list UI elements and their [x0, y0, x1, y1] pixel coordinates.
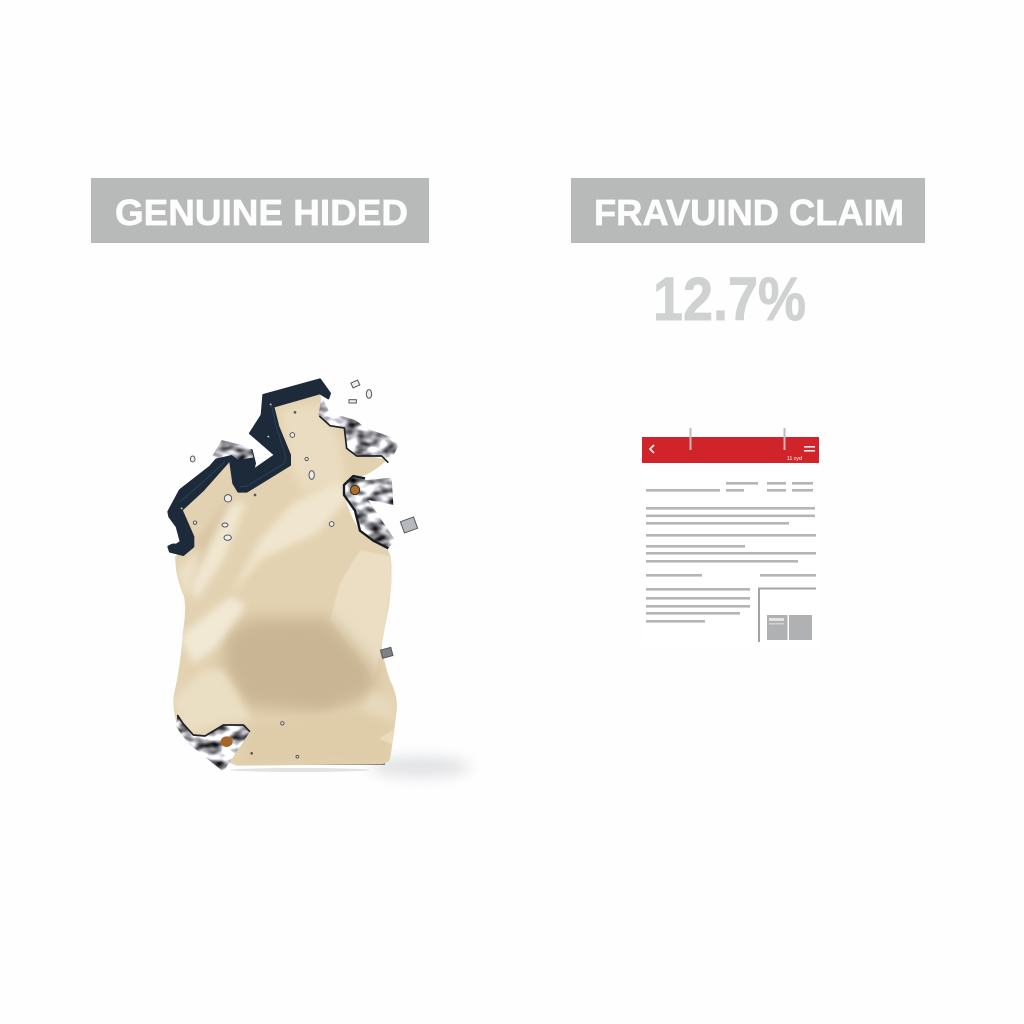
- right heading label: [571, 178, 925, 243]
- red header bar: [642, 437, 819, 463]
- dark torn rim: [168, 379, 330, 555]
- right heading label: FRAVUIND CLAIM: [594, 194, 904, 233]
- bag body: [173, 390, 397, 767]
- percentage figure: 12.7%: [653, 266, 806, 334]
- left heading label: GENUINE HIDED: [115, 194, 408, 233]
- infographic canvas: [91, 178, 925, 781]
- foil tear: right side: [344, 476, 395, 548]
- illustration: red-header document: [642, 428, 819, 647]
- document sheet: [642, 437, 819, 647]
- foil tear: top right: [318, 397, 401, 463]
- binding pins: [690, 428, 786, 450]
- rim highlight fold: [180, 405, 286, 502]
- foil tear: bottom left: [176, 715, 250, 772]
- illustration: torn paper bag: [168, 379, 470, 777]
- left heading label: [91, 178, 429, 243]
- foil tear: top left: [210, 440, 253, 460]
- scattered foil fragments: [181, 380, 418, 758]
- ground shadow: [230, 757, 470, 777]
- corner bracket: [759, 588, 816, 642]
- document text lines: [646, 482, 816, 623]
- red header bar: 11 zyd: [787, 456, 802, 462]
- thumbnail blocks: [767, 615, 812, 640]
